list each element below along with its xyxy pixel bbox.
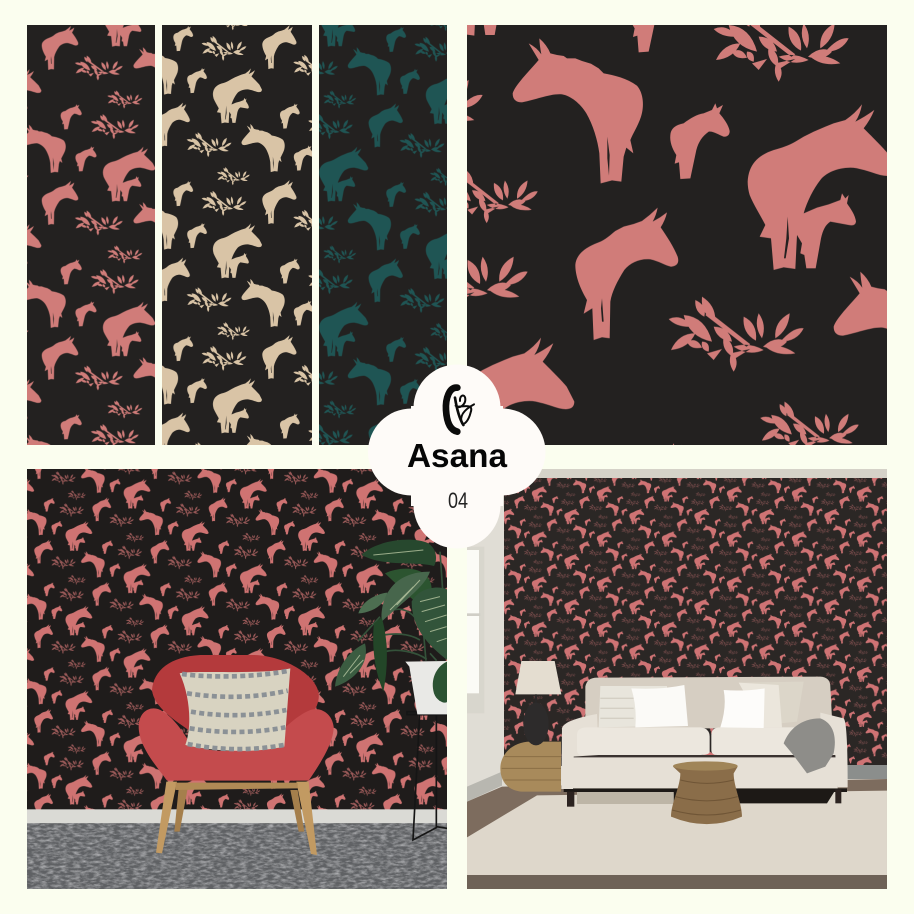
armchair: [139, 655, 334, 855]
ceiling strip: [467, 469, 887, 479]
panel: teal pattern swatch: [319, 25, 447, 445]
panel: enlarged pink pattern: [467, 25, 887, 445]
plant stand: [407, 712, 449, 840]
panel: pink pattern swatch: [27, 25, 155, 445]
side wall baseboard: [467, 772, 502, 802]
sofa: [561, 677, 848, 807]
collection number: 04: [448, 488, 468, 513]
side table: [500, 742, 561, 792]
rug: [467, 791, 887, 890]
wooden floor: [467, 779, 887, 890]
baseboard: [27, 809, 447, 823]
logo medallion: [368, 364, 546, 548]
panel: sofa room mockup: [467, 469, 887, 889]
wallpaper wall: [504, 478, 887, 766]
panel: cream pattern swatch: [162, 25, 312, 445]
potted plant: [335, 540, 447, 714]
grey throw blanket: [784, 718, 835, 773]
brand name: Asana: [407, 437, 508, 474]
panel: armchair room mockup: [27, 469, 447, 889]
wallpaper wall: [27, 469, 447, 811]
icon: brush monogram: [446, 388, 474, 432]
window: [467, 547, 484, 713]
wicker coffee table: [671, 761, 742, 824]
carpet: [27, 823, 447, 890]
quatrefoil badge: [368, 364, 546, 548]
pillows: [599, 682, 804, 728]
cushion: [180, 668, 290, 751]
table lamp: [515, 661, 561, 745]
baseboard: [847, 765, 887, 779]
